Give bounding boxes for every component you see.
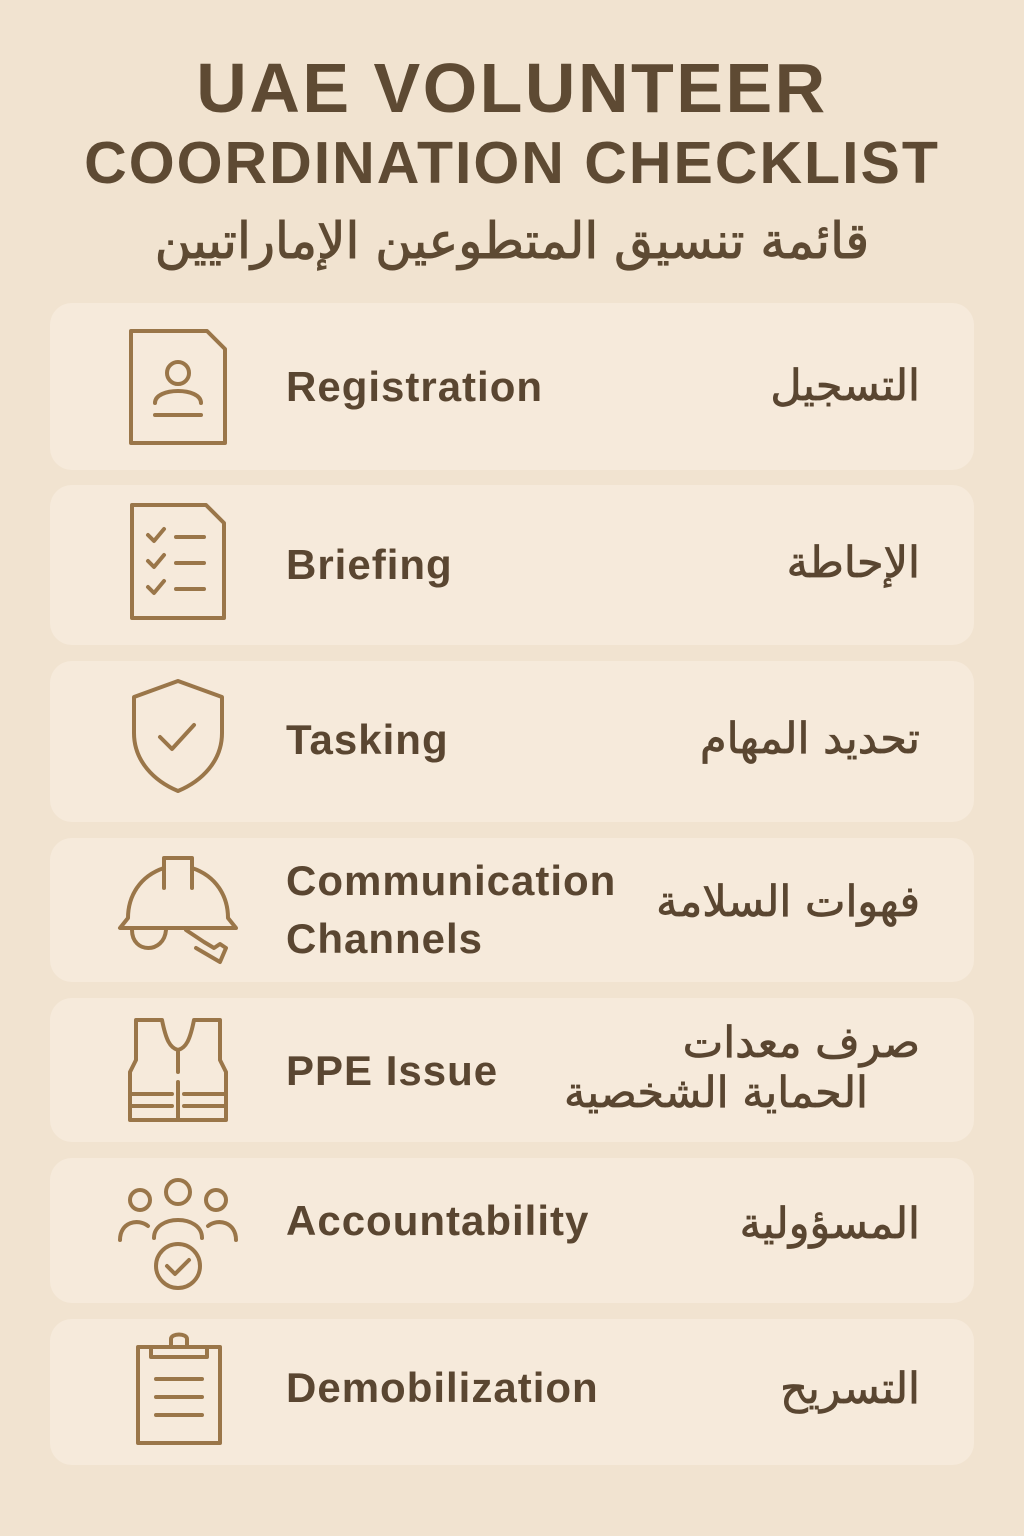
icon: shield (132, 679, 224, 793)
card: accountability (50, 1158, 974, 1303)
subtitle: COORDINATION CHECKLIST (84, 130, 940, 196)
arabic: الحماية الشخصية (564, 1068, 868, 1118)
icon: clipboard (136, 1332, 222, 1445)
arabic: الإحاطة (787, 538, 920, 588)
arabic: التسريح (780, 1364, 920, 1414)
label: Briefing (286, 541, 453, 588)
label: Communication (286, 857, 616, 904)
arabic: فهوات السلامة (656, 877, 920, 927)
label: Registration (286, 363, 543, 410)
arabic (564, 1018, 920, 1118)
label: Demobilization (286, 1364, 599, 1411)
card: communication (50, 838, 974, 982)
label: PPE Issue (286, 1047, 498, 1094)
card: ppe (50, 998, 974, 1142)
card: briefing (50, 485, 974, 645)
card: tasking (50, 661, 974, 822)
title: UAE VOLUNTEER (196, 49, 828, 127)
label: Channels (286, 915, 483, 962)
icon: checklist (130, 503, 226, 620)
label: Accountability (286, 1197, 589, 1244)
arabic: صرف معدات (683, 1018, 920, 1068)
label (286, 857, 616, 962)
icon: id document (129, 329, 227, 445)
arabic title: قائمة تنسيق المتطوعين الإماراتيين (155, 212, 869, 270)
card: registration (50, 303, 974, 470)
arabic: المسؤولية (740, 1199, 920, 1249)
icon: people check (118, 1178, 238, 1290)
arabic: التسجيل (770, 361, 920, 411)
card: demobilization (50, 1319, 974, 1465)
label: Tasking (286, 716, 449, 763)
arabic: تحديد المهام (700, 714, 920, 764)
icon: hard hat (118, 856, 238, 964)
icon: vest (128, 1018, 228, 1122)
